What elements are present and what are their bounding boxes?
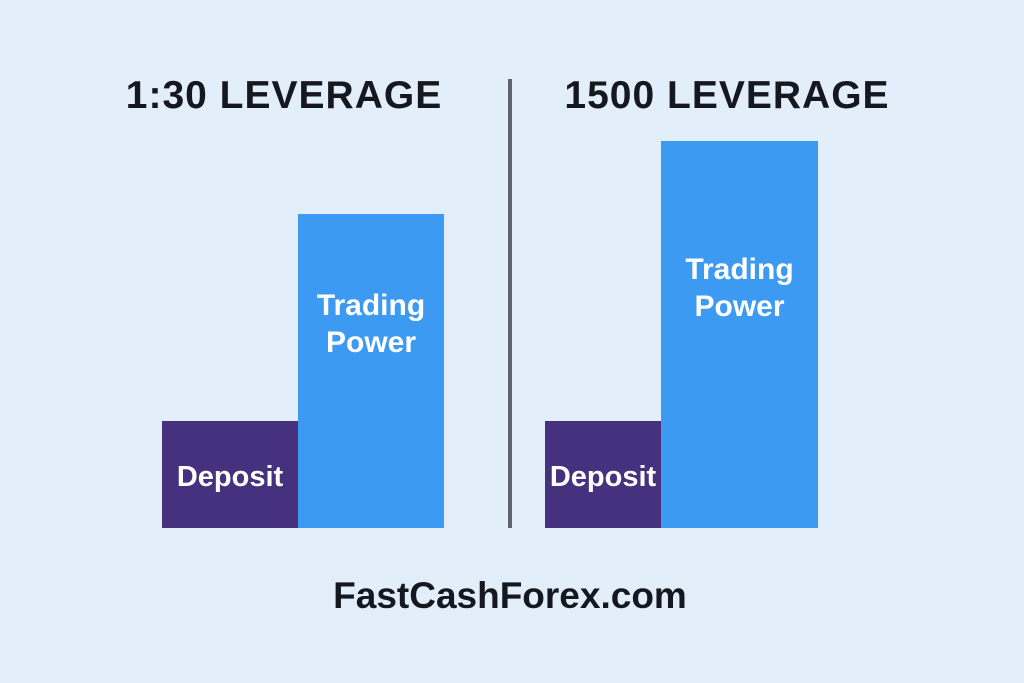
- chart: right trading power bar: Trading: [685, 253, 794, 286]
- title: 1500 leverage: 1500 LEVERAGE: [564, 74, 890, 117]
- chart: right deposit bar: Deposit: [550, 461, 656, 493]
- footer: website: FastCashForex.com: [333, 575, 687, 616]
- title: 1:30 leverage: 1:30 LEVERAGE: [126, 74, 442, 117]
- chart: right trading power bar: [661, 141, 818, 528]
- chart: left deposit bar: Deposit: [177, 461, 283, 493]
- divider: [508, 79, 512, 528]
- chart: left trading power bar: Trading: [317, 289, 425, 322]
- chart: right trading power bar: Power: [694, 290, 785, 323]
- chart: left trading power bar: [298, 214, 444, 528]
- chart: right deposit bar: [545, 421, 661, 528]
- chart: left trading power bar: Power: [326, 326, 416, 359]
- chart: left deposit bar: [162, 421, 298, 528]
